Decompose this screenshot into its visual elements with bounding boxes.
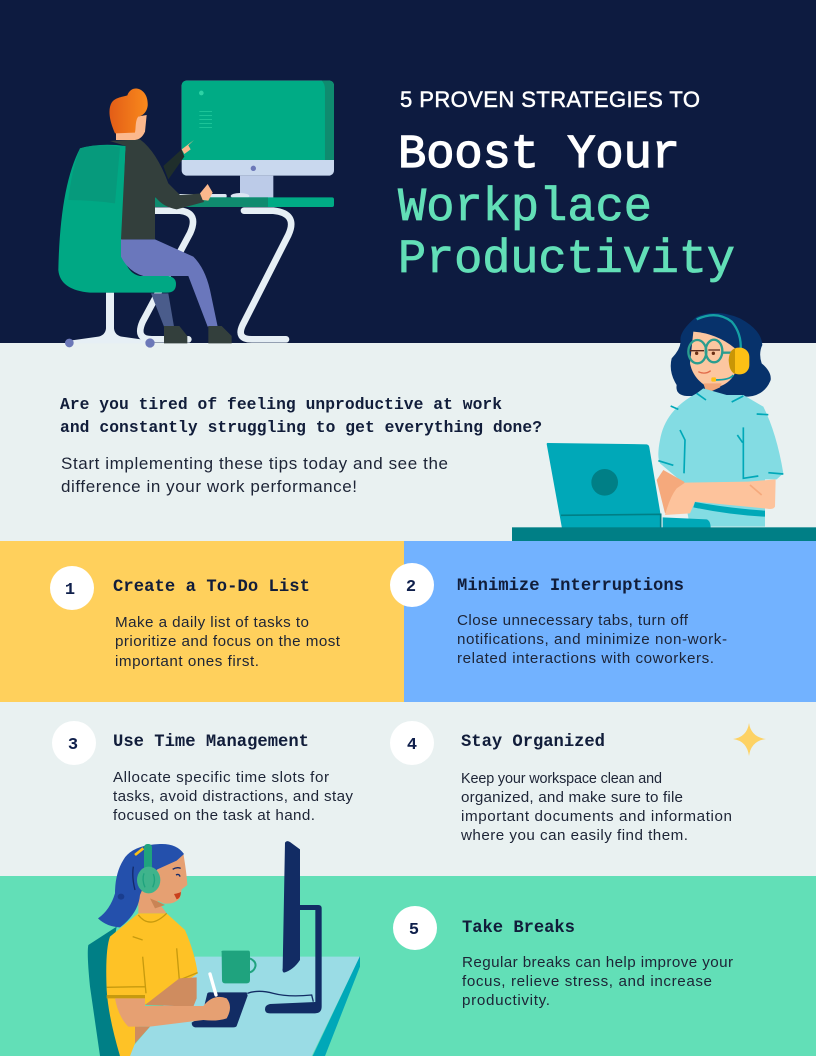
step 1 number badge: 1 — [65, 581, 75, 600]
intro supporting text: difference in your work performance! — [61, 477, 357, 496]
step 1 body — [115, 614, 341, 670]
step 1 — [50, 566, 341, 670]
step 2 number badge: 2 — [406, 578, 416, 597]
step 4 body — [460, 771, 732, 844]
icon: yellow sparkle — [733, 723, 766, 756]
panel: intro background — [0, 343, 816, 541]
heading: 5 proven strategies to: 5 PROVEN STRATEGIES TO — [400, 87, 700, 112]
step 3 body: Allocate specific time slots for — [113, 769, 329, 786]
step 1 body: prioritize and focus on the most — [115, 633, 341, 650]
step 5 body: Regular breaks can help improve your — [462, 954, 733, 971]
intro supporting text: Start implementing these tips today and see the — [61, 454, 448, 473]
step 5 number badge: 5 — [409, 921, 419, 940]
step 5 heading: Take Breaks — [462, 919, 575, 938]
step 2 number badge — [390, 563, 434, 607]
step 3 body — [113, 769, 353, 824]
intro question text — [60, 395, 542, 437]
step 4 heading: Stay Organized — [461, 733, 605, 752]
step 3 body: focused on the task at hand. — [113, 807, 315, 824]
panel: header background — [0, 0, 816, 343]
step 4 body: Keep your workspace clean and — [461, 771, 662, 787]
panel: steps 3 and 4 background — [0, 702, 816, 876]
step 5 number badge — [393, 906, 437, 950]
title: boost your workplace productivity — [398, 129, 735, 287]
step 4 body: important documents and information — [461, 808, 732, 825]
step 3 — [52, 721, 353, 824]
step 4 number badge — [390, 721, 434, 765]
step 3 heading: Use Time Management — [113, 733, 309, 752]
title: boost your workplace productivity: Workplace — [398, 182, 652, 235]
intro supporting text — [61, 454, 448, 496]
step 3 number badge — [52, 721, 96, 765]
step 5 body: productivity. — [462, 992, 550, 1009]
step 2 body: related interactions with coworkers. — [457, 650, 714, 667]
illustration: man at desktop computer — [58, 81, 334, 348]
panel: step 2 blue background — [404, 541, 816, 702]
step 5 body — [462, 954, 733, 1009]
step 2 body — [457, 612, 727, 667]
illustration: woman with headset and laptop — [512, 313, 816, 541]
intro question text: Are you tired of feeling unproductive at work — [60, 395, 502, 414]
step 1 body: Make a daily list of tasks to — [115, 614, 309, 631]
step 3 number badge: 3 — [68, 736, 78, 755]
step 4 body: where you can easily find them. — [460, 827, 688, 844]
step 5 — [393, 906, 733, 1009]
step 4 — [390, 721, 732, 844]
step 4 number badge: 4 — [407, 736, 417, 755]
panel: step 1 yellow background — [0, 541, 404, 702]
step 3 body: tasks, avoid distractions, and stay — [113, 788, 353, 805]
illustration: woman with headphones at monitor — [88, 841, 360, 1056]
step 2 body: Close unnecessary tabs, turn off — [457, 612, 689, 629]
step 4 body: organized, and make sure to file — [461, 789, 683, 806]
step 1 number badge — [50, 566, 94, 610]
step 1 body: important ones first. — [115, 653, 259, 670]
step 2 body: notifications, and minimize non-work- — [457, 631, 727, 648]
step 2 heading: Minimize Interruptions — [457, 577, 684, 596]
intro question text: and constantly struggling to get everything done? — [60, 418, 542, 437]
step 1 heading: Create a To-Do List — [113, 578, 310, 597]
title: boost your workplace productivity: Productivity — [398, 234, 735, 287]
title: boost your workplace productivity: Boost Your — [398, 129, 680, 182]
step 2 — [390, 563, 727, 667]
step 5 body: focus, relieve stress, and increase — [462, 973, 712, 990]
panel: step 5 green background — [0, 876, 816, 1056]
